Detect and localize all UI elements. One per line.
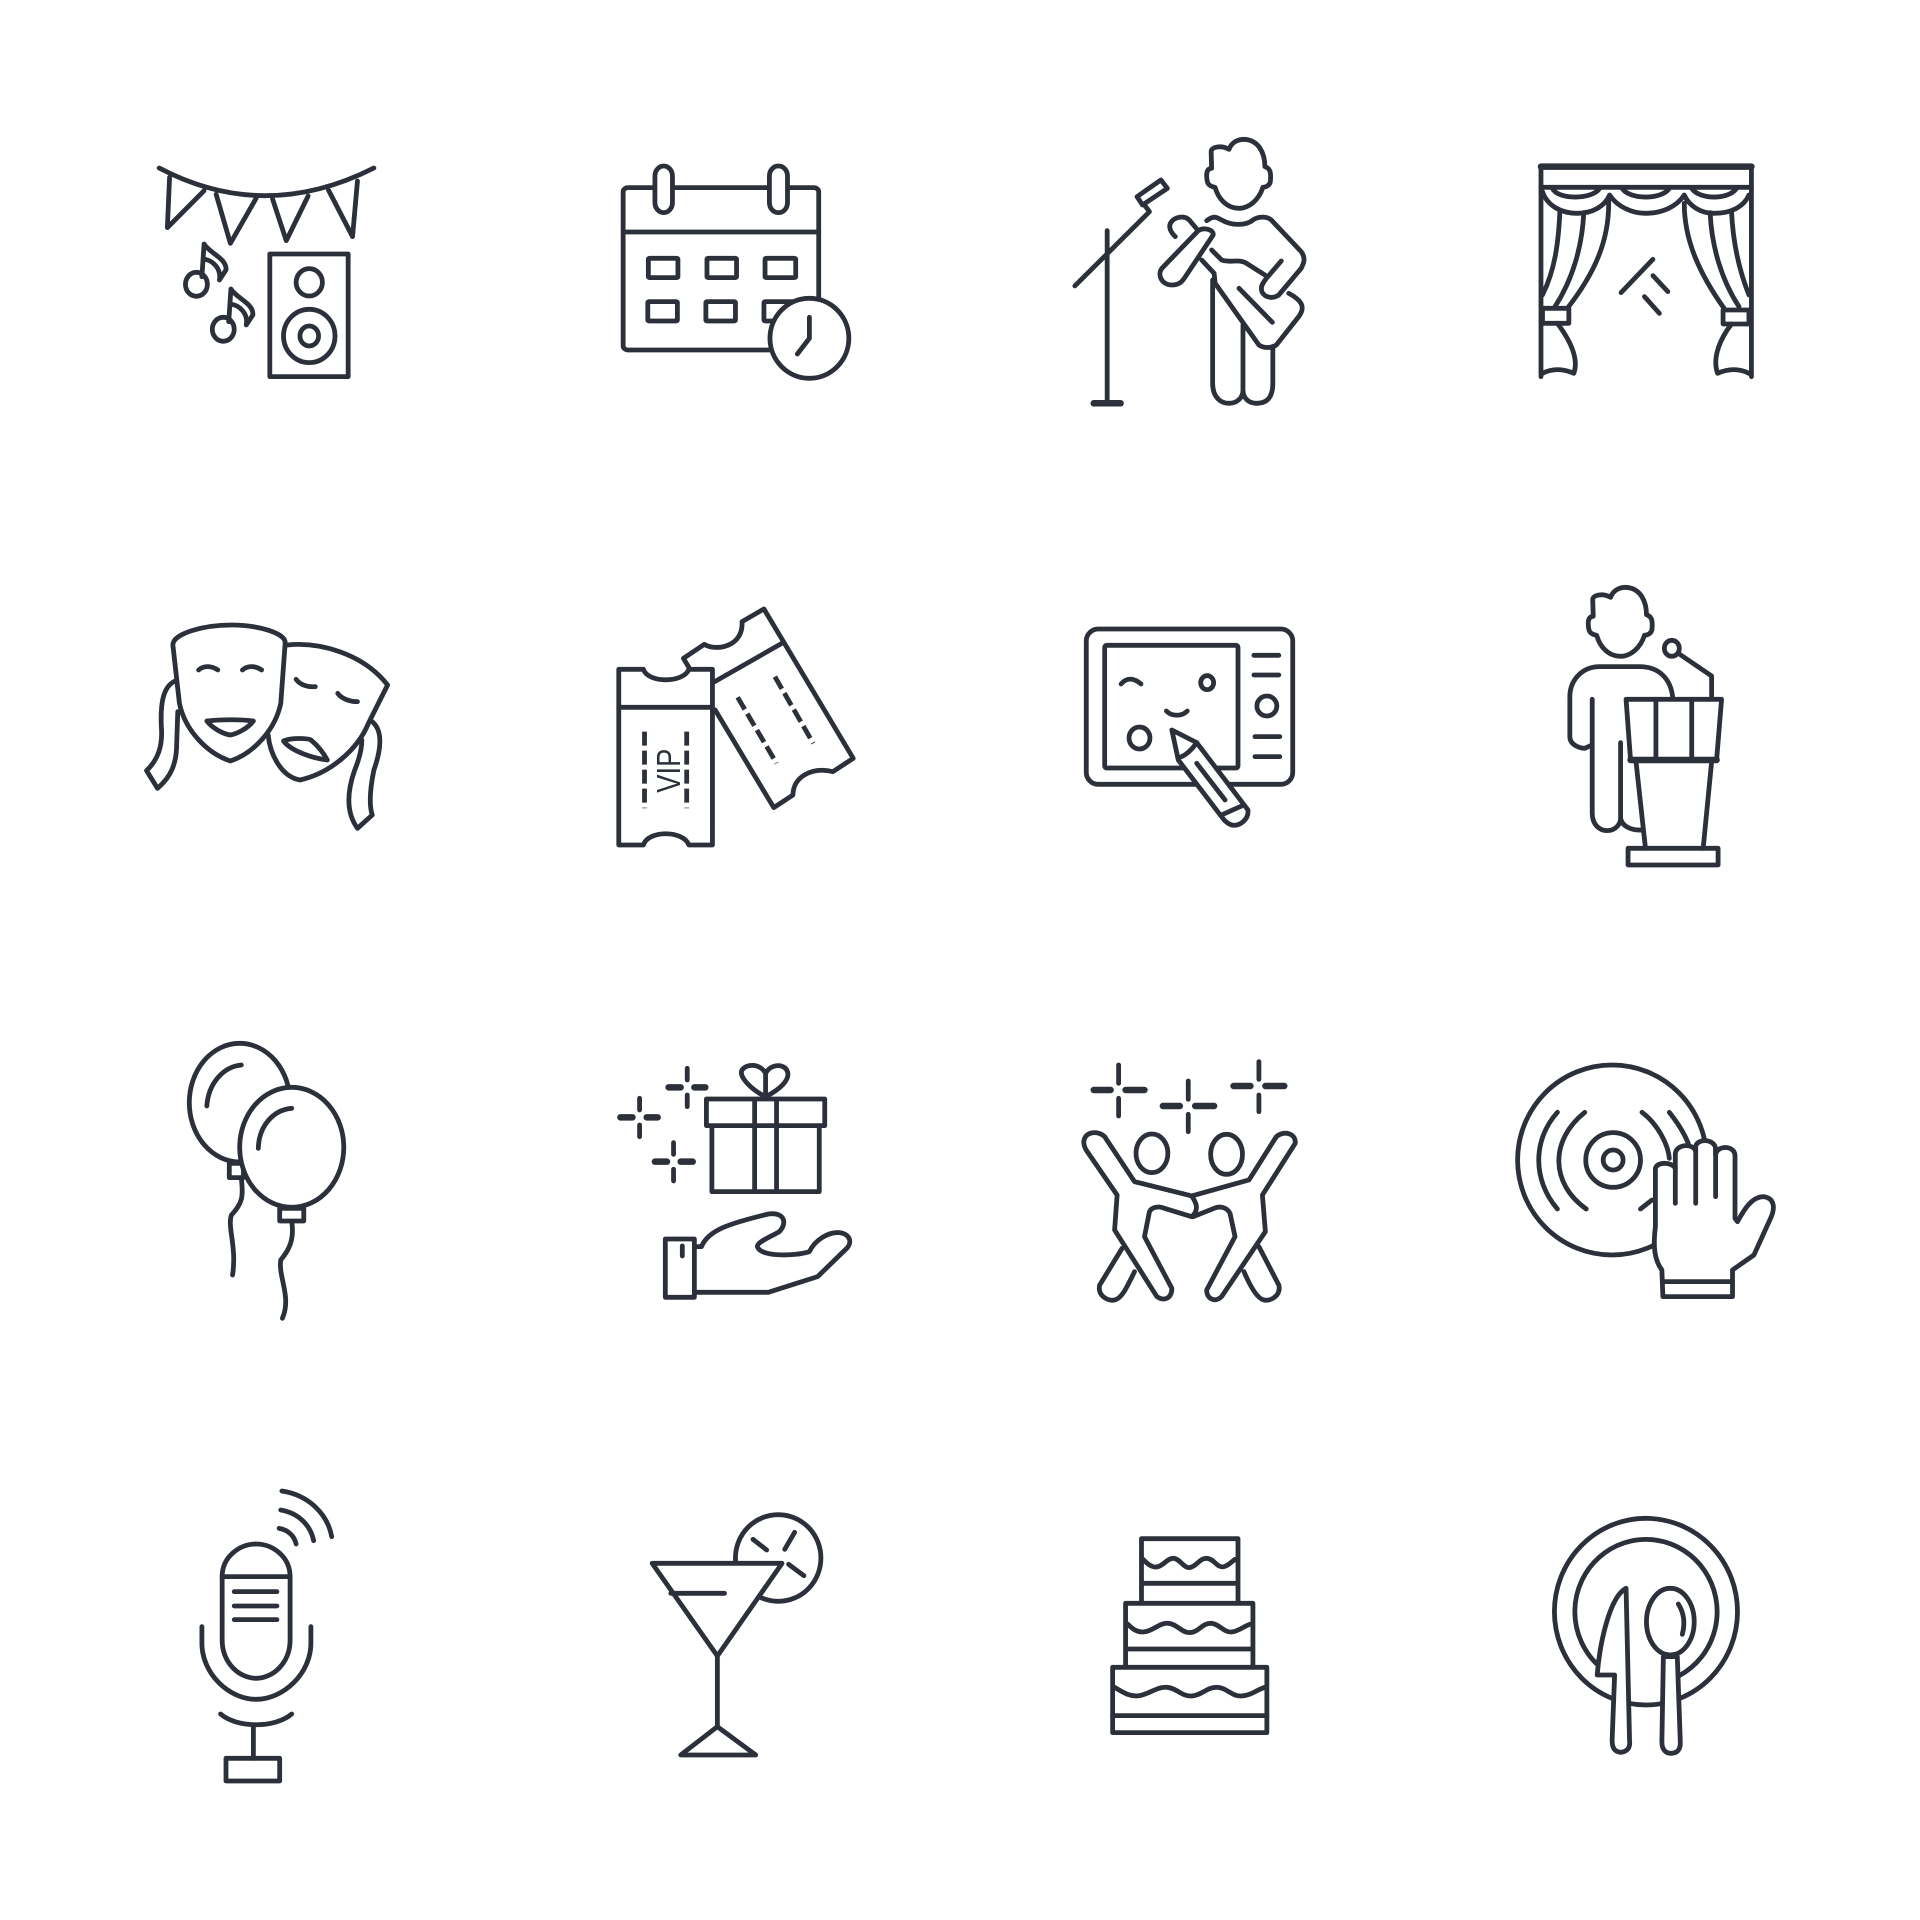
clock xyxy=(770,298,849,378)
head xyxy=(1588,587,1652,656)
front balloon xyxy=(240,1087,344,1318)
happy mask xyxy=(173,625,285,761)
middle tier xyxy=(1126,1603,1253,1666)
date cells xyxy=(648,258,796,321)
valance scallops xyxy=(1542,188,1749,213)
signal waves xyxy=(279,1491,332,1544)
icon: podcast microphone xyxy=(202,1491,332,1781)
stage light marks xyxy=(1621,259,1668,313)
back ticket xyxy=(683,609,853,808)
sad mask xyxy=(268,644,388,780)
speaker xyxy=(270,254,348,377)
bunting garland xyxy=(159,168,374,243)
citrus slice xyxy=(735,1515,821,1601)
icon: balloons xyxy=(189,1043,344,1318)
icon: drawing tablet with pencil xyxy=(1086,629,1293,825)
right drape xyxy=(1684,203,1749,373)
right dancer xyxy=(1192,1133,1295,1300)
top tier xyxy=(1141,1539,1238,1602)
VIP text: VIP xyxy=(650,749,687,793)
knife xyxy=(1597,1588,1630,1752)
sparkles xyxy=(1094,1062,1284,1132)
icon: theatre masks xyxy=(147,625,388,828)
front ticket xyxy=(619,669,712,845)
martini glass xyxy=(652,1563,782,1755)
icon: stage curtains xyxy=(1541,167,1751,377)
screen doodle xyxy=(1121,676,1214,749)
icon: VIP tickets xyxy=(619,609,853,845)
left dancer xyxy=(1084,1133,1196,1300)
music notes xyxy=(185,244,253,341)
ribbons xyxy=(147,681,380,828)
podium microphone xyxy=(1664,640,1712,698)
head xyxy=(1207,139,1271,208)
tablet frame xyxy=(1086,629,1293,784)
curtain frame xyxy=(1541,167,1751,377)
left drape xyxy=(1542,200,1609,373)
back balloon xyxy=(189,1043,290,1275)
spoon xyxy=(1646,1588,1694,1753)
gift box xyxy=(706,1065,825,1192)
podium xyxy=(1626,699,1722,865)
bottom tier xyxy=(1113,1667,1267,1733)
icon: three tier cake xyxy=(1113,1539,1267,1733)
icon: speaker at podium xyxy=(1570,587,1722,865)
open hand xyxy=(665,1214,850,1297)
plate xyxy=(1554,1518,1737,1705)
body xyxy=(1570,667,1673,831)
icon: cocktail glass with citrus slice xyxy=(652,1515,821,1755)
calendar page xyxy=(623,166,819,350)
tablet controls xyxy=(1254,655,1280,757)
icon: singer with guitar and microphone stand xyxy=(1075,139,1304,403)
icon: plate with knife and spoon xyxy=(1554,1518,1737,1753)
icon: calendar with clock xyxy=(623,166,849,378)
hand xyxy=(1654,1141,1773,1297)
cradle and stand xyxy=(202,1627,311,1781)
sparkles xyxy=(620,1068,705,1181)
vinyl record xyxy=(1518,1065,1707,1255)
icon: gift on open hand xyxy=(620,1065,850,1297)
pencil xyxy=(1172,730,1248,825)
icon: vinyl record with DJ hand xyxy=(1518,1065,1773,1297)
microphone stand xyxy=(1075,180,1167,403)
body and guitar xyxy=(1160,217,1304,403)
icon: dancing couple with sparkles xyxy=(1084,1062,1295,1300)
icon: party bunting, music notes and speaker xyxy=(159,168,374,377)
microphone capsule xyxy=(222,1544,290,1678)
